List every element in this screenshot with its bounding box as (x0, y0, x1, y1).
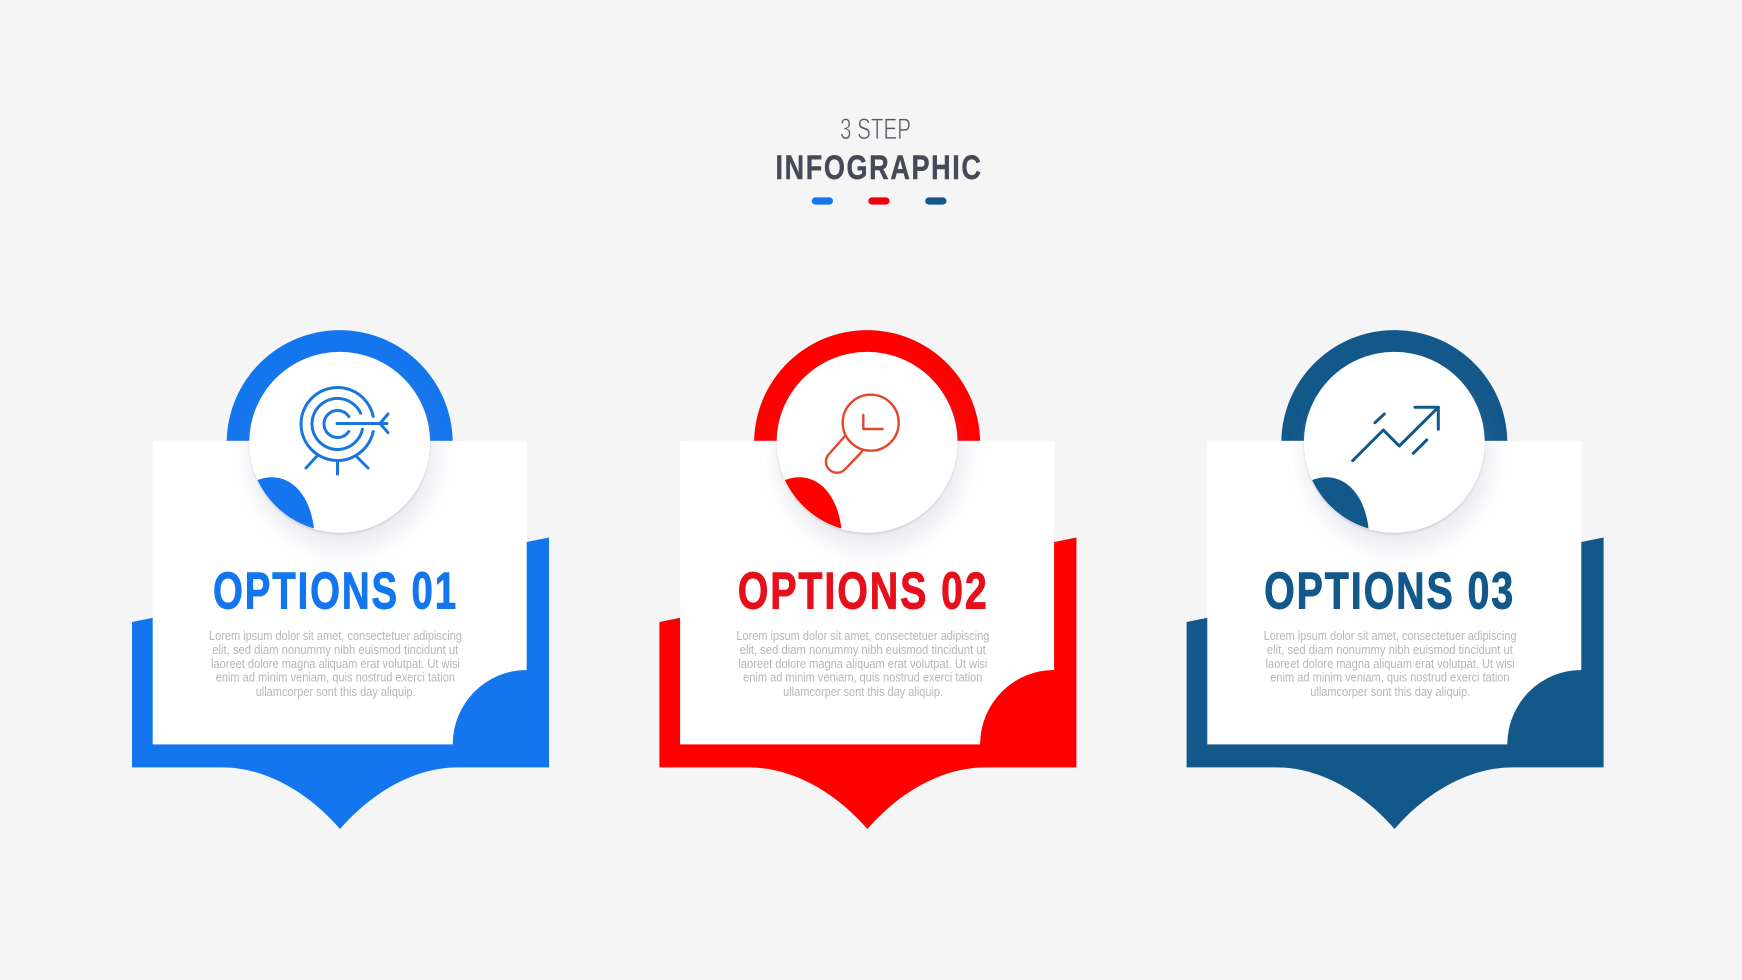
body text: laoreet dolore magna aliquam erat volutpat. Ut wisi (738, 657, 987, 671)
panel: options 01 (132, 330, 549, 829)
header (776, 113, 982, 205)
circle leaf accent (258, 477, 314, 528)
heading: infographic: INFOGRAPHIC (776, 149, 982, 187)
icon circle (1304, 352, 1485, 533)
body text (736, 629, 989, 699)
circle leaf accent (1312, 477, 1369, 528)
body text: enim ad minim veniam, quis nostrud exerci tation (1270, 671, 1510, 685)
pointer backing shape (659, 538, 1076, 829)
body text (209, 629, 462, 699)
panel: options 02 (659, 330, 1076, 829)
colour dash: red (868, 197, 890, 205)
corner quarter circle (1507, 670, 1582, 746)
body text: Lorem ipsum dolor sit amet, consectetuer adipiscing (1264, 629, 1517, 643)
icon: target (301, 387, 388, 474)
body text: ullamcorper sont this day aliquip. (256, 685, 416, 699)
body text: elit, sed diam nonummy nibh euismod tincidunt ut (212, 643, 459, 657)
white card (680, 441, 1054, 744)
icon: magnifier clock (826, 395, 899, 473)
heading: options 03: OPTIONS 03 (1264, 563, 1515, 621)
body text: elit, sed diam nonummy nibh euismod tincidunt ut (740, 643, 986, 657)
body text: elit, sed diam nonummy nibh euismod tincidunt ut (1267, 643, 1513, 657)
body text: laoreet dolore magna aliquam erat volutpat. Ut wisi (1266, 657, 1515, 671)
body text: Lorem ipsum dolor sit amet, consectetuer adipiscing (736, 629, 989, 643)
top ring (227, 330, 453, 441)
body text: ullamcorper sont this day aliquip. (1310, 685, 1470, 699)
colour dash: navy (925, 197, 946, 205)
circle leaf accent (785, 477, 841, 528)
heading: options 01: OPTIONS 01 (213, 563, 458, 621)
pointer backing shape (1187, 538, 1604, 829)
top ring (754, 330, 980, 441)
body text: ullamcorper sont this day aliquip. (783, 685, 943, 699)
icon circle (249, 352, 430, 533)
white card (1207, 441, 1581, 744)
pointer backing shape (132, 538, 549, 829)
heading: options 02: OPTIONS 02 (738, 563, 989, 621)
body text: laoreet dolore magna aliquam erat volutpat. Ut wisi (211, 657, 460, 671)
white card (153, 441, 527, 744)
corner quarter circle (453, 670, 528, 746)
colour dash: blue (812, 197, 833, 205)
corner quarter circle (980, 670, 1055, 746)
heading: 3 step: 3 STEP (840, 113, 911, 146)
body text: Lorem ipsum dolor sit amet, consectetuer adipiscing (209, 629, 462, 643)
body text: enim ad minim veniam, quis nostrud exerci tation (743, 671, 982, 685)
panel: options 03 (1187, 330, 1604, 829)
icon circle (777, 352, 958, 533)
body text (1264, 629, 1517, 699)
top ring (1281, 330, 1507, 441)
icon: rising trend arrow (1353, 407, 1438, 461)
body text: enim ad minim veniam, quis nostrud exerci tation (216, 671, 455, 685)
